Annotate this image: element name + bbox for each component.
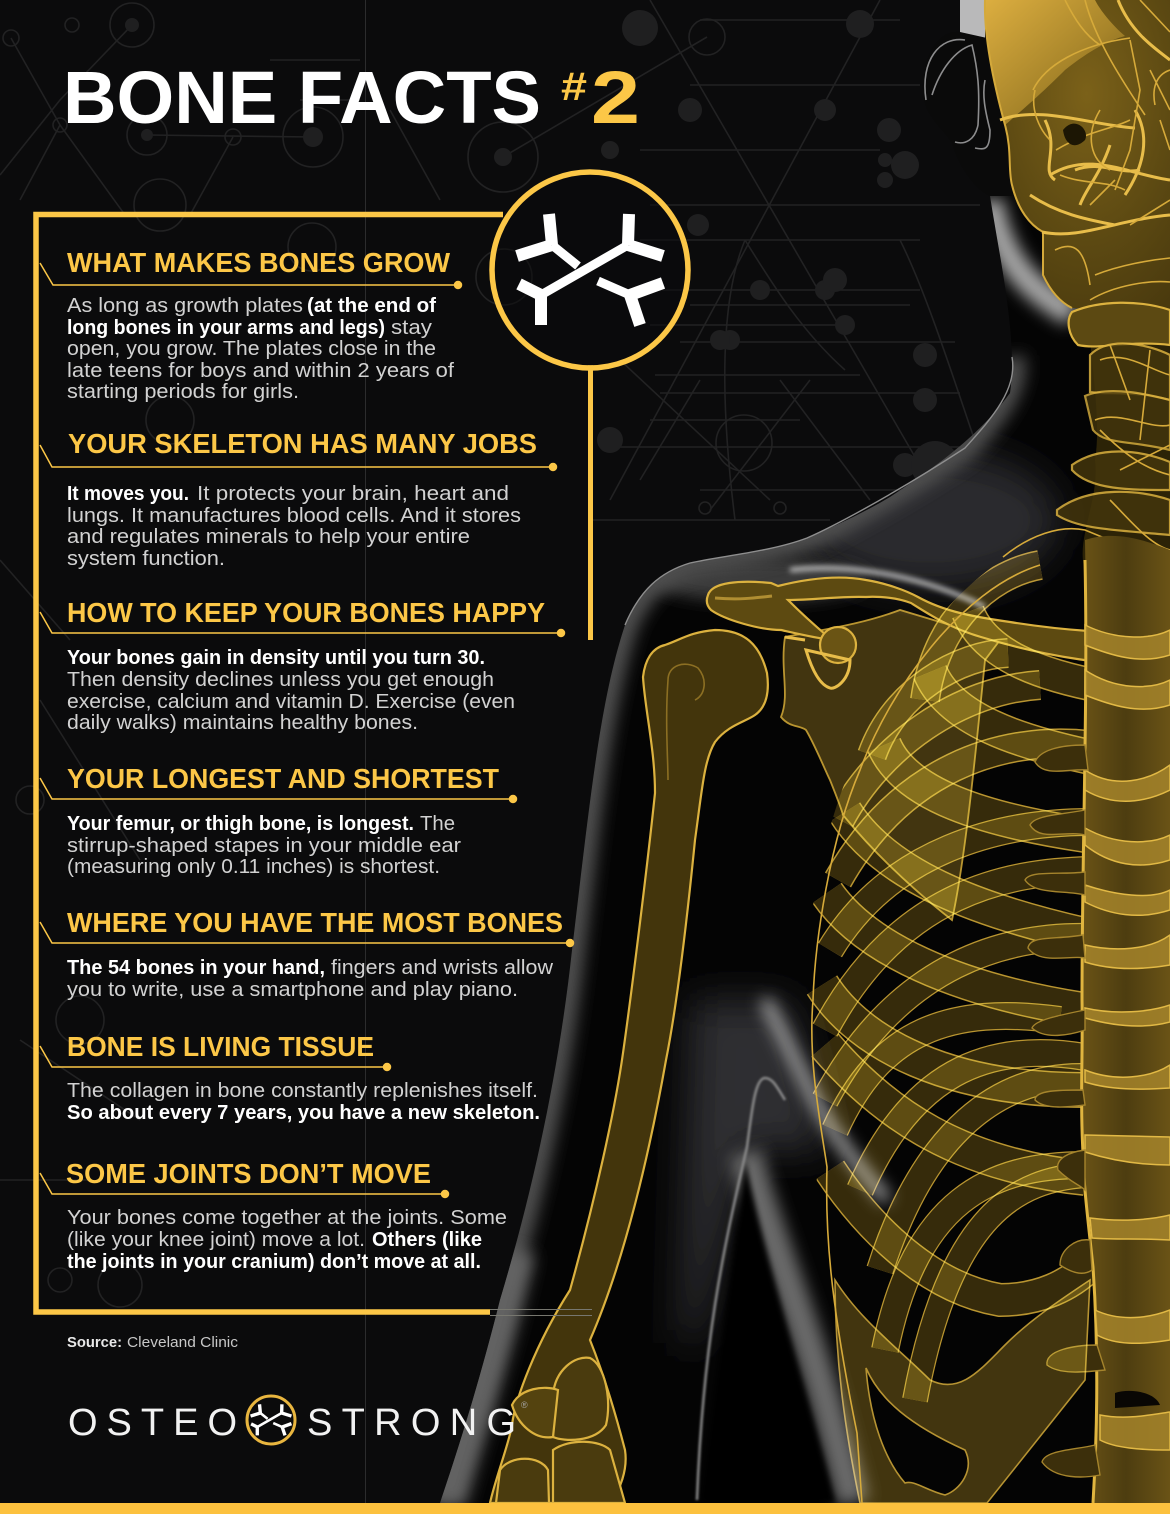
body text <box>67 812 461 878</box>
body text: exercise, calcium and vitamin D. Exercise (even <box>67 690 515 713</box>
body text: As long as growth plates <box>67 294 303 317</box>
icon: crossed bones badge <box>492 172 688 368</box>
heading rule <box>40 445 556 470</box>
heading: WHERE YOU HAVE THE MOST BONES <box>67 907 563 938</box>
lower arm shine <box>445 1250 515 1503</box>
heading: SOME JOINTS DON’T MOVE <box>66 1158 431 1189</box>
body text: the joints in your cranium) don’t move at all. <box>67 1250 481 1273</box>
humerus <box>490 630 768 1503</box>
body text <box>67 482 521 570</box>
vertical hairline <box>365 0 366 1503</box>
neck and shoulder shading <box>800 450 1060 590</box>
source credit: Cleveland Clinic <box>127 1334 239 1351</box>
acromion detail <box>715 596 772 599</box>
body text <box>67 646 515 734</box>
shoulder rim line <box>625 357 1013 625</box>
body text: and regulates minerals to help your entire <box>67 525 470 548</box>
body text: So about every 7 years, you have a new skeleton. <box>67 1101 540 1124</box>
lower rib mass <box>835 1280 1090 1503</box>
logo: OsteoStrong: ® <box>521 1400 528 1410</box>
title number: 2 <box>591 56 640 139</box>
panel frame <box>36 214 592 1316</box>
body text: daily walks) maintains healthy bones. <box>67 711 418 734</box>
vertebra discs <box>1085 625 1170 1450</box>
body text: starting periods for girls. <box>67 380 299 403</box>
body text: fingers and wrists allow <box>331 956 553 979</box>
coracoid <box>820 627 856 663</box>
body text: It moves you. <box>67 482 189 505</box>
scapula <box>781 610 1000 920</box>
arm pit shading <box>680 1000 830 1343</box>
neck vertebrae <box>1003 303 1170 570</box>
neck highlight <box>990 200 1073 314</box>
back ribs <box>825 565 1090 1400</box>
crossed bones <box>517 214 663 325</box>
skull <box>985 0 1170 312</box>
body text: (measuring only 0.11 inches) is shortest. <box>67 855 440 878</box>
body text: The collagen in bone constantly replenishes itself. <box>67 1079 538 1102</box>
fact: where you have the most bones <box>40 907 574 1001</box>
body text: open, you grow. The plates close in the <box>67 337 436 360</box>
fact: your longest and shortest <box>40 763 516 878</box>
heading: YOUR LONGEST AND SHORTEST <box>67 763 499 794</box>
heading rule <box>40 263 462 288</box>
heading: YOUR SKELETON HAS MANY JOBS <box>68 428 537 459</box>
title: BONE FACTS <box>63 56 541 139</box>
heading rule <box>40 612 564 636</box>
background molecule dots <box>125 10 959 489</box>
transverse processes <box>1025 745 1105 1477</box>
fact: your skeleton has many jobs <box>40 428 556 570</box>
body text: lungs. It manufactures blood cells. And it stores <box>67 504 521 527</box>
body text: Your bones gain in density until you turn 30. <box>67 646 485 669</box>
body text: long bones in your arms and legs) <box>67 316 385 339</box>
fact: some joints don't move <box>40 1158 507 1273</box>
torso shine <box>745 1153 853 1503</box>
logo: OsteoStrong <box>68 1396 528 1444</box>
logo: OsteoStrong: STRONG <box>307 1402 516 1444</box>
shoulder highlight <box>790 568 985 607</box>
body silhouette <box>440 196 1079 1503</box>
body text <box>67 1079 540 1124</box>
heading: HOW TO KEEP YOUR BONES HAPPY <box>67 597 545 628</box>
heading: BONE IS LIVING TISSUE <box>67 1031 374 1062</box>
fact: what makes bones grow <box>40 247 462 403</box>
vertebra gaps <box>1115 1391 1160 1408</box>
body text: (at the end of <box>307 294 436 317</box>
body text <box>67 956 553 1001</box>
body text: Your bones come together at the joints. Some <box>67 1206 507 1229</box>
skull detail lines <box>1000 0 1170 234</box>
bottom bar <box>0 1503 1170 1514</box>
body text: The 54 bones in your hand, <box>67 956 325 979</box>
body text: stirrup-shaped stapes in your middle ear <box>67 834 461 857</box>
humerus head detail <box>667 664 704 780</box>
arm rim glow <box>440 357 1013 1503</box>
body text: stay <box>391 316 433 339</box>
body text: Others (like <box>372 1228 482 1251</box>
body text: system function. <box>67 547 225 570</box>
body text: Your femur, or thigh bone, is longest. <box>67 812 414 835</box>
elbow bones <box>496 1358 625 1503</box>
body text: It protects your brain, heart and <box>197 482 509 505</box>
spine <box>1082 536 1170 1503</box>
rib cage outer edge <box>812 565 1040 1503</box>
shoulder shading <box>650 558 870 602</box>
fact: how to keep your bones happy <box>40 597 564 734</box>
coracoid glow <box>785 637 850 688</box>
source credit: Source: <box>67 1334 122 1351</box>
heading rule <box>40 778 516 802</box>
clavicle <box>707 578 1170 664</box>
skeleton <box>490 0 1170 1503</box>
arm inner rim <box>697 1078 785 1500</box>
source credit <box>67 1334 239 1351</box>
body text: late teens for boys and within 2 years of <box>67 359 454 382</box>
heading: WHAT MAKES BONES GROW <box>67 247 451 278</box>
body text: Then density declines unless you get enough <box>67 668 494 691</box>
icon: ear <box>923 0 1012 196</box>
front ribs <box>806 606 1093 1317</box>
title hash: # <box>561 65 587 109</box>
armpit streak <box>765 1000 887 1200</box>
heading rule <box>40 1173 448 1198</box>
heading rule <box>40 922 574 946</box>
body text: (like your knee joint) move a lot. <box>67 1228 365 1251</box>
logo: OsteoStrong: OSTEO <box>68 1402 237 1444</box>
fact: bone is living tissue <box>40 1031 540 1124</box>
eye socket shadow <box>1063 124 1086 145</box>
black armpit gap <box>726 1162 836 1503</box>
logo icon <box>247 1396 295 1444</box>
body text <box>67 1206 507 1273</box>
body text: The <box>420 812 455 835</box>
body text <box>67 294 454 403</box>
heading rule <box>40 1046 390 1070</box>
body text: you to write, use a smartphone and play piano. <box>67 978 518 1001</box>
background molecule pattern <box>0 0 985 1307</box>
